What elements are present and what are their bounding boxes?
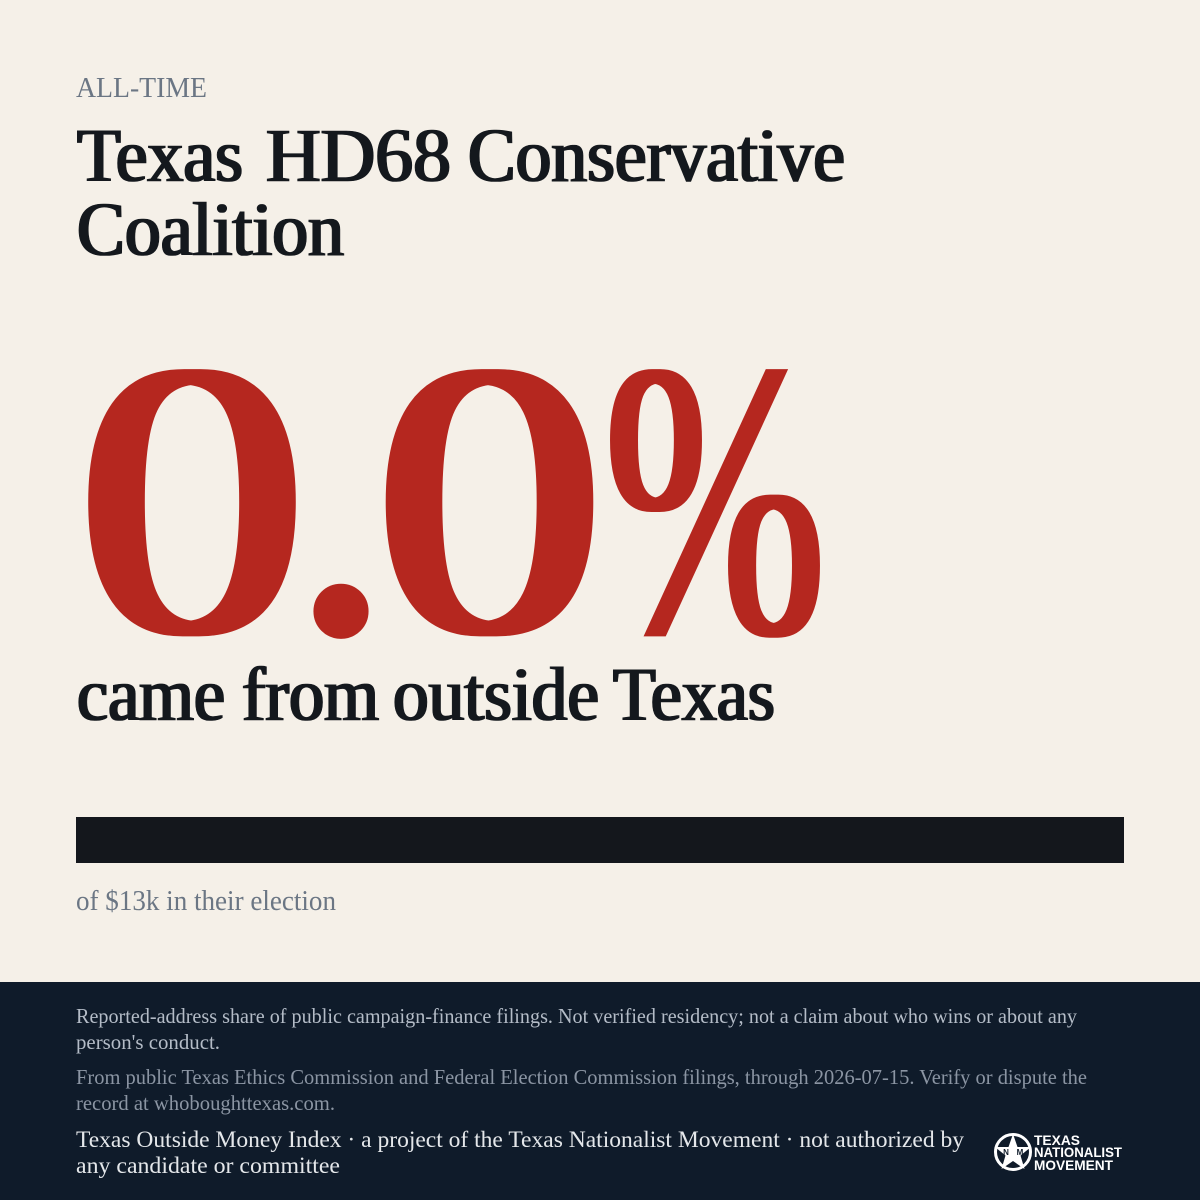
- bar caption: of $13k in their election: [76, 885, 336, 917]
- title: Coalition: [77, 188, 344, 272]
- statistic caption: from: [242, 653, 379, 737]
- statistic caption: outside: [393, 653, 599, 737]
- icon: star in ring: [995, 1134, 1031, 1170]
- attribution text: any candidate or committee: [76, 1153, 340, 1178]
- big statistic: 0.0%: [79, 280, 825, 718]
- share bar: [76, 817, 1124, 863]
- title: Texas: [77, 114, 243, 198]
- title: Conservative: [468, 114, 845, 198]
- big statistic: 0.0%: 0: [376, 280, 602, 718]
- source text: From public Texas Ethics Commission and Federal Election Commission filings, through 2026-07-15. Verify or dispute the: [76, 1065, 1087, 1089]
- title: HD68: [266, 114, 451, 198]
- logo wordmark: NATIONALIST: [1034, 1145, 1123, 1160]
- statistic caption: Texas: [613, 653, 775, 737]
- big statistic: 0.0%: %: [605, 280, 825, 718]
- title: [77, 114, 845, 272]
- attribution text: [76, 1127, 964, 1178]
- logo wordmark: TEXAS: [1034, 1133, 1080, 1148]
- big statistic: 0.0%: 0: [79, 280, 305, 718]
- eyebrow label: ALL-TIME: [76, 73, 207, 104]
- big statistic: 0.0%: .: [298, 331, 384, 708]
- disclaimer text: Reported-address share of public campaign-finance filings. Not verified residency; not a claim about who wins or about any: [76, 1004, 1077, 1028]
- source text: [76, 1065, 1087, 1115]
- source text: record at whoboughttexas.com.: [76, 1091, 335, 1115]
- footer panel: [0, 982, 1200, 1200]
- disclaimer text: [76, 1004, 1077, 1054]
- icon: star in ring: M: [1017, 1148, 1024, 1157]
- icon: star in ring: N: [1003, 1148, 1009, 1157]
- disclaimer text: person's conduct.: [76, 1030, 220, 1054]
- statistic caption: [77, 653, 775, 737]
- attribution text: Texas Outside Money Index · a project of the Texas Nationalist Movement · not authorized by: [76, 1127, 964, 1152]
- logo: Texas Nationalist Movement: [995, 1133, 1123, 1173]
- statistic caption: came: [77, 653, 225, 737]
- logo wordmark: [1034, 1133, 1123, 1173]
- logo wordmark: MOVEMENT: [1034, 1158, 1114, 1173]
